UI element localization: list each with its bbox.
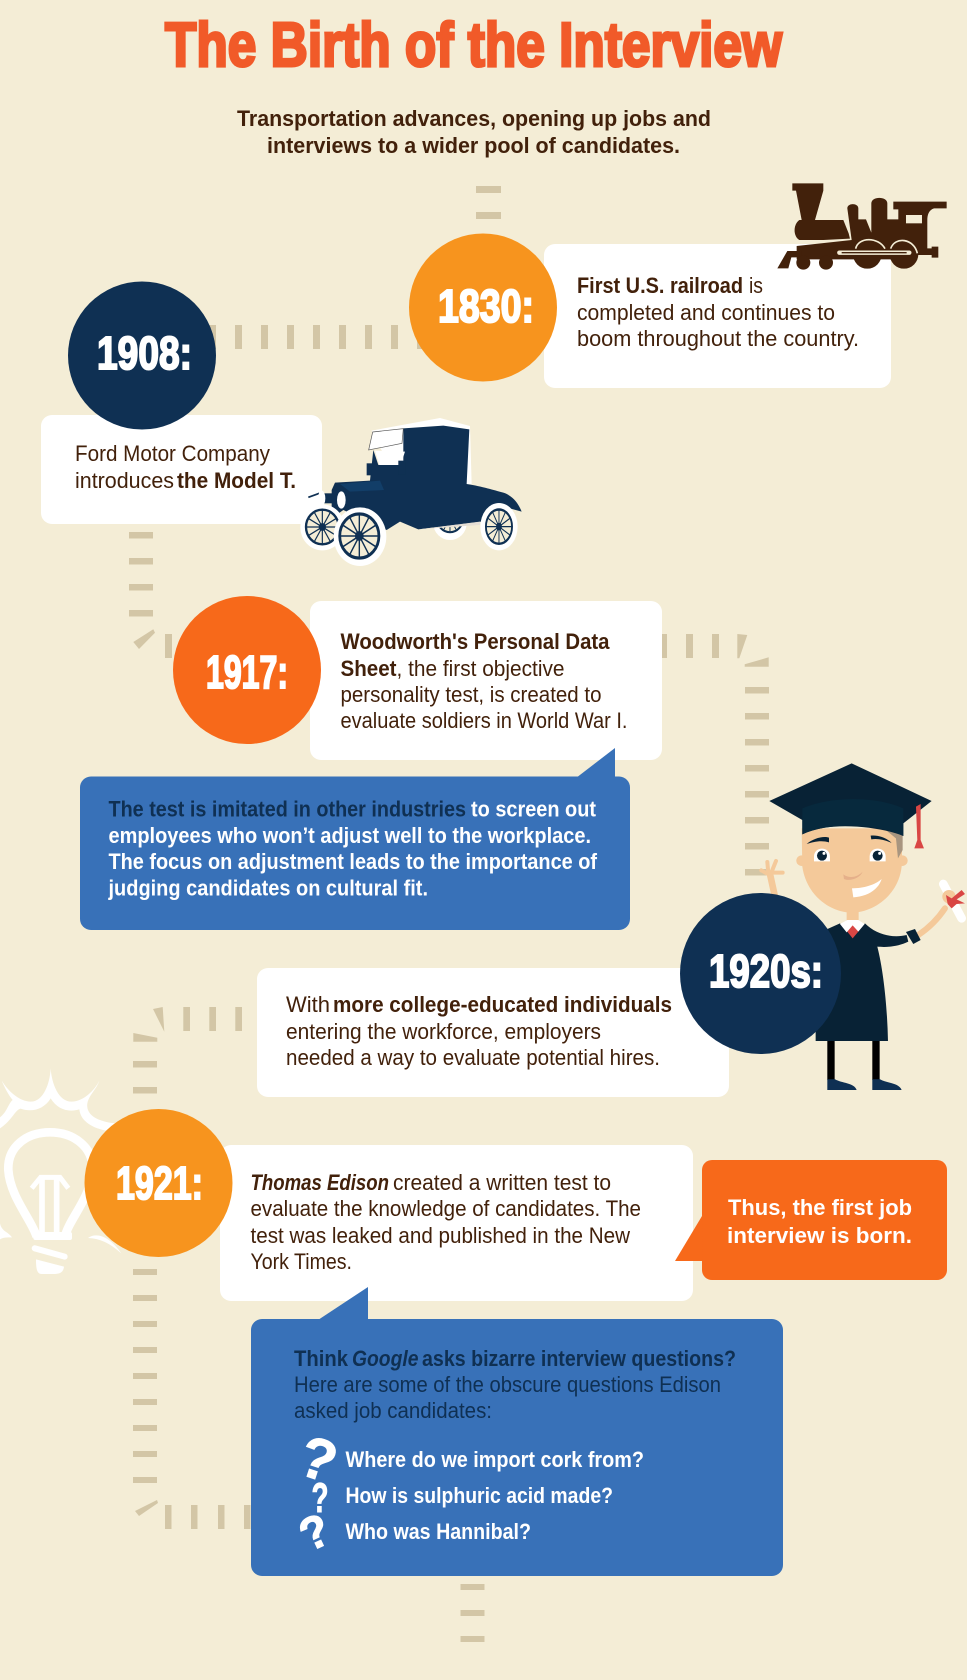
- 1917 text: , the first objective: [396, 656, 564, 681]
- question list: Who was Hannibal?: [346, 1519, 531, 1544]
- 1830 text: completed and continues to: [577, 300, 835, 325]
- callout text: judging candidates on cultural fit.: [108, 876, 428, 900]
- 1921 text: [250, 1170, 641, 1274]
- 1830 text: is: [749, 273, 763, 298]
- subtitle: interviews to a wider pool of candidates.: [267, 133, 680, 158]
- icon: Model T car: [300, 418, 522, 566]
- subtitle: Transportation advances, opening up jobs and: [237, 106, 711, 131]
- dashed timeline connector: [129, 186, 769, 1642]
- 1921 year badge: [84, 1109, 232, 1257]
- icon: question marks: ?: [312, 1474, 328, 1521]
- 1920s text: needed a way to evaluate potential hires.: [286, 1045, 660, 1070]
- 1920s year badge: 1920s:: [709, 945, 823, 997]
- icon: graduate character: [761, 763, 965, 1090]
- 1917 text: Sheet: [340, 656, 397, 681]
- intro text: Google: [352, 1346, 418, 1371]
- icon: light bulb: [0, 1068, 121, 1274]
- 1917 text: Woodworth's Personal Data: [340, 629, 610, 654]
- question list: [346, 1447, 644, 1544]
- 1920s text: entering the workforce, employers: [286, 1019, 601, 1044]
- panel: 1920s college-educated card: [257, 968, 729, 1097]
- intro text: asked job candidates:: [294, 1398, 492, 1423]
- 1830 year badge: 1830:: [438, 280, 534, 332]
- callout text: The focus on adjustment leads to the importance of: [108, 849, 598, 874]
- intro text: asks bizarre interview questions?: [422, 1346, 736, 1371]
- 1908 text: Ford Motor Company: [75, 441, 270, 466]
- 1908 text: [75, 441, 296, 493]
- panel: 1921 Edison card: [220, 1145, 693, 1301]
- callout text: [108, 796, 598, 900]
- callout: first job interview: [675, 1160, 947, 1280]
- 1908 text: introduces: [75, 468, 174, 493]
- question list: How is sulphuric acid made?: [346, 1483, 613, 1508]
- icon: question marks: [291, 1423, 345, 1562]
- 1908 year badge: [68, 282, 216, 430]
- panel: 1908 Model T card: [41, 415, 322, 524]
- subtitle: [237, 106, 711, 158]
- 1917 text: [340, 629, 628, 733]
- callout text: Thus, the first job: [728, 1195, 912, 1220]
- 1917 year badge: 1917:: [206, 646, 288, 698]
- 1921 text: Thomas Edison: [250, 1170, 389, 1195]
- callout text: The test is imitated in other industries: [108, 796, 466, 822]
- 1917 year badge: [173, 596, 321, 744]
- 1920s text: more college-educated individuals: [333, 992, 672, 1017]
- 1920s year badge: [680, 893, 841, 1054]
- icon: question marks: ?: [291, 1503, 338, 1562]
- 1917 text: evaluate soldiers in World War I.: [340, 708, 628, 733]
- callout: Edison questions: [251, 1287, 783, 1576]
- 1921 text: created a written test to: [393, 1170, 611, 1195]
- panel: 1917 personal data sheet card: [310, 601, 662, 760]
- callout text: employees who won’t adjust well to the workplace.: [108, 823, 591, 848]
- 1921 text: evaluate the knowledge of candidates. The: [250, 1196, 641, 1221]
- intro text: [294, 1346, 736, 1423]
- callout text: [727, 1195, 912, 1248]
- 1830 year badge: [409, 234, 557, 382]
- callout: cultural fit: [80, 748, 630, 930]
- 1920s text: With: [286, 992, 330, 1017]
- callout text: interview is born.: [727, 1223, 912, 1248]
- icon: question marks: ?: [291, 1423, 345, 1496]
- 1921 text: York Times.: [250, 1249, 352, 1274]
- 1908 year badge: 1908:: [97, 327, 192, 379]
- 1830 text: First U.S. railroad: [577, 273, 743, 298]
- callout text: to screen out: [471, 796, 597, 822]
- icon: steam locomotive: [777, 183, 947, 270]
- intro text: Think: [294, 1346, 349, 1371]
- intro text: Here are some of the obscure questions Edison: [294, 1372, 721, 1397]
- panel: 1830 railroad card: [544, 244, 891, 388]
- 1917 text: personality test, is created to: [340, 682, 602, 707]
- 1908 text: the Model T.: [177, 468, 296, 493]
- 1921 text: test was leaked and published in the New: [250, 1223, 630, 1248]
- 1830 text: [577, 273, 859, 351]
- question list: Where do we import cork from?: [346, 1447, 644, 1472]
- 1830 text: boom throughout the country.: [577, 326, 859, 351]
- 1921 year badge: 1921:: [116, 1157, 203, 1209]
- title: The Birth of the Interview: [165, 11, 783, 80]
- 1920s text: [286, 992, 672, 1070]
